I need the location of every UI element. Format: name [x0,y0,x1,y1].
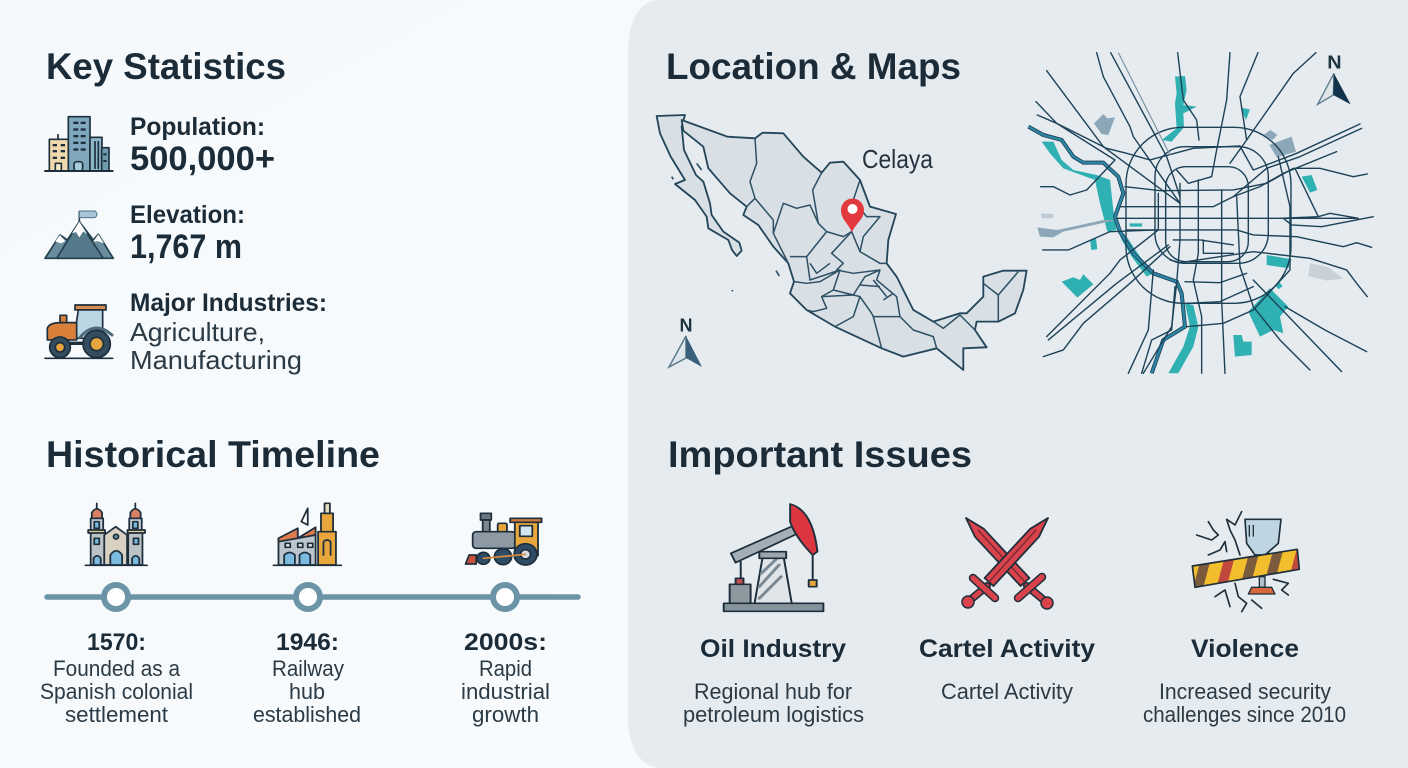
value: manufacturing: Manufacturing [130,345,302,375]
marker: 1570 [104,585,128,609]
issue: oil industry: Oil Industry [700,635,846,663]
green and grey areas [1037,76,1343,373]
issue: cartel activity: Cartel Activity [919,635,1095,663]
panel: key statistics [45,46,327,375]
icon: steam locomotive [466,513,542,565]
issue: violence: challenges since 2010 [1143,702,1346,727]
map: city street network [1028,51,1373,373]
issue: oil industry [683,635,864,727]
icon: crossed swords [962,518,1053,609]
panel: important issues [668,434,1346,727]
panel: right shaded background [628,0,1408,768]
heading: important issues: Important Issues [668,434,972,475]
issue: oil industry: petroleum logistics [683,702,864,727]
timeline entry: 1570: settlement [65,702,168,727]
icon: city buildings [45,117,113,171]
timeline entry: 1946: Railway [272,656,344,681]
timeline axis [47,585,578,609]
label: Celaya: Celaya [862,144,933,174]
timeline entry: 1570: 1570: [87,629,146,656]
issue: violence: Increased security [1159,679,1331,704]
timeline entry: 1946 [253,629,361,727]
issue: cartel activity: Cartel Activity [941,679,1073,704]
icon: oil pumpjack [724,504,823,611]
timeline entry: 2000s: Rapid [479,656,532,681]
value: elevation: 1,767 m [130,228,242,266]
heading: location and maps: Location & Maps [666,46,961,87]
icon: north arrow on city map: N [1327,51,1342,72]
value: population: 500,000+ [130,140,275,178]
label: elevation: Elevation: [130,201,245,229]
icon: factory [273,503,341,565]
issue: violence [1143,635,1346,727]
panel: location and maps [657,46,1373,373]
timeline entry: 2000s: growth [472,702,539,727]
label: major industries: Major Industries: [130,289,327,317]
icon: mountain with flag [45,211,113,258]
river [1028,127,1185,373]
timeline entry: 1570: Spanish colonial [40,679,193,704]
timeline entry: 2000s: industrial [461,679,550,704]
panel: historical timeline [40,434,578,727]
timeline entry: 1570 [40,629,193,727]
timeline entry: 1946: established [253,702,361,727]
timeline entry: 2000s [461,629,550,727]
icon: north arrow on city map [1318,51,1351,104]
icon: map pin [841,198,864,232]
map: Mexico states [657,115,1027,370]
icon: broken glass with hazard tape [1192,512,1308,612]
hazard tape [1192,548,1300,588]
heading: key statistics: Key Statistics [46,46,286,87]
timeline entry: 1946: hub [289,679,325,704]
issue: violence: Violence [1191,635,1299,663]
issue: cartel activity [919,635,1095,704]
icon: north arrow on country map: N [680,316,692,336]
ring roads and streets [1036,53,1373,373]
timeline entry: 1946: 1946: [276,629,339,656]
icon: north arrow on country map [669,316,702,367]
timeline entry: 2000s: 2000s: [464,629,547,656]
heading: historical timeline: Historical Timeline [46,434,380,475]
timeline entry: 1570: Founded as a [53,656,181,681]
issue: oil industry: Regional hub for [694,679,852,704]
label: population: Population: [130,113,265,141]
icon: tractor [45,305,113,358]
value: agriculture: Agriculture, [130,317,265,347]
marker: 2000s [493,585,517,609]
icon: colonial cathedral [85,503,147,565]
marker: 1946 [296,585,320,609]
